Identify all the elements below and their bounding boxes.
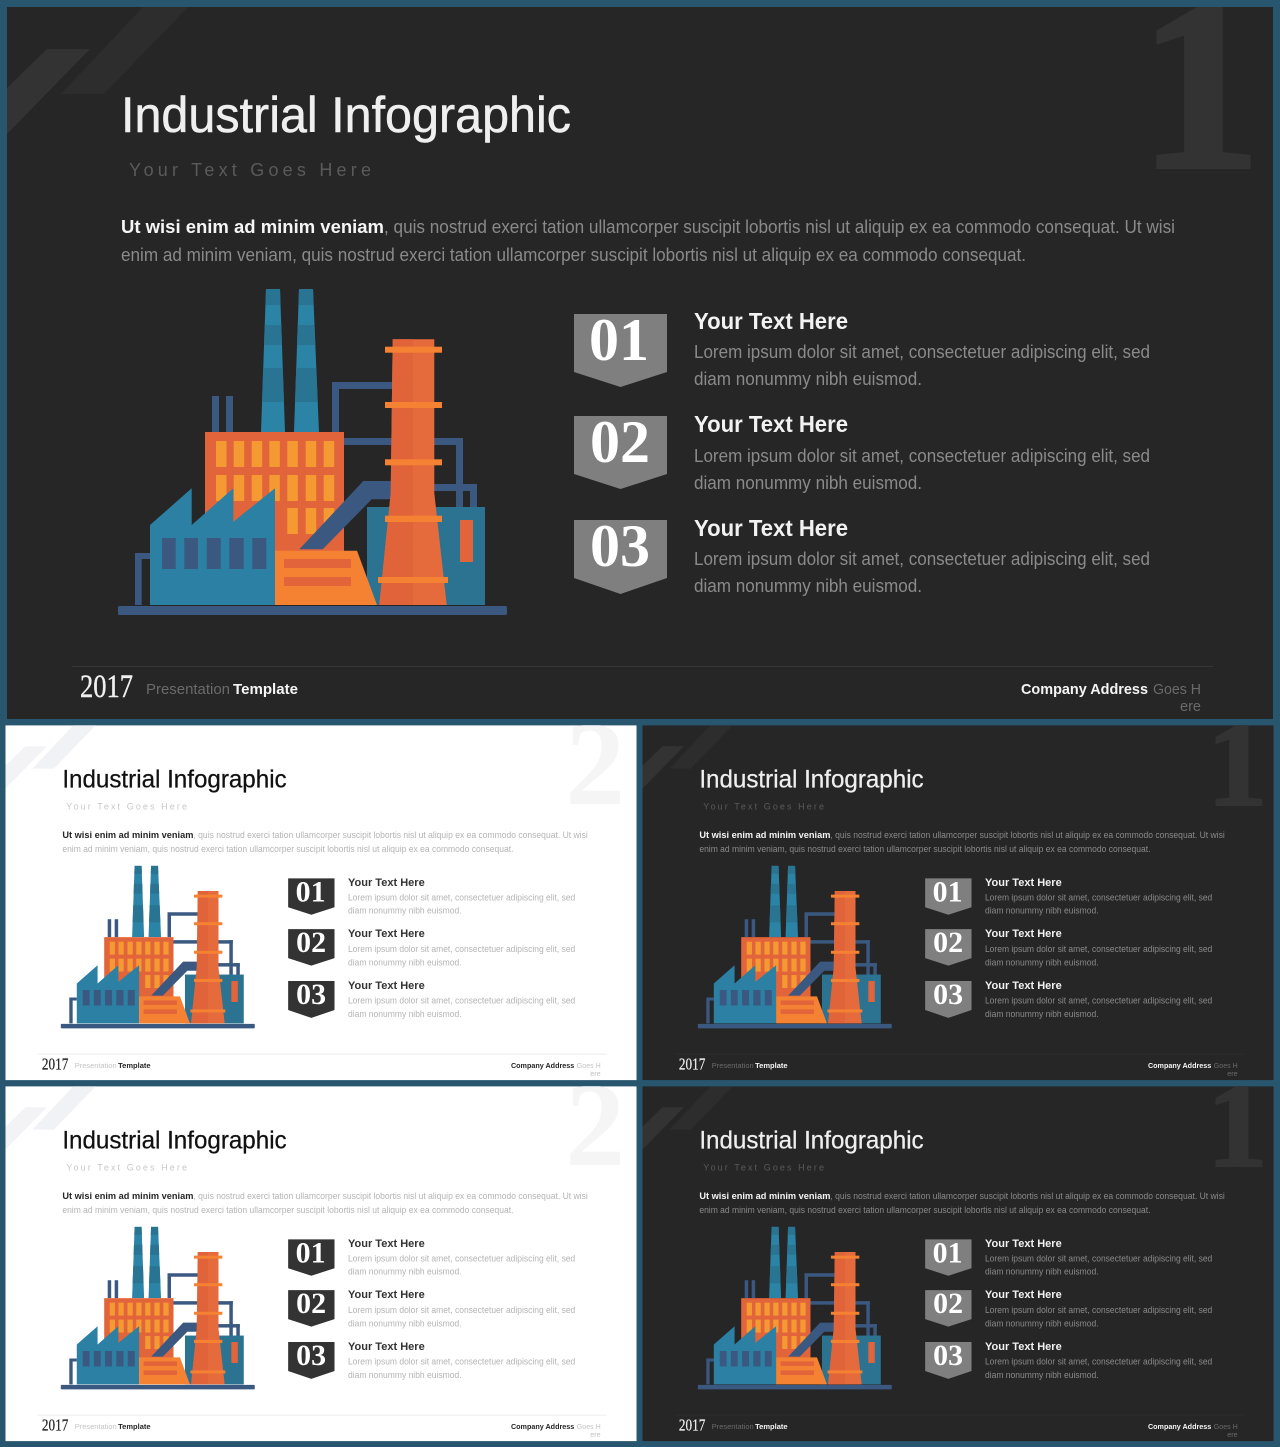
panel: small dark slide bottom right: Your Text Here [985, 1238, 1062, 1250]
panel: small white slide top left: Goes H [577, 1061, 601, 1070]
panel: small white slide bottom left: diam nonummy nibh euismod. [348, 1319, 462, 1329]
panel: small dark slide bottom right: Goes H [1214, 1422, 1238, 1431]
panel: small white slide top left: enim ad minim veniam, quis nostrud exerci tation ullamcorper suscipit lobortis nisl ut aliquip ex ea commodo consequat. [62, 844, 513, 854]
panel: small dark slide bottom right: 02 [933, 1287, 963, 1320]
panel: small white slide bottom left: , quis nostrud exerci tation ullamcorper suscipit lobortis nisl ut aliquip ex ea commodo consequat. Ut wisi [193, 1191, 588, 1201]
panel: small dark slide top right: enim ad minim veniam, quis nostrud exerci tation ullamcorper suscipit lobortis nisl ut aliquip ex ea commodo consequat. [699, 844, 1150, 854]
panel: small white slide top left: Presentation [75, 1061, 117, 1070]
panel: large dark slide: Goes H [1153, 681, 1201, 698]
panel: small white slide top left: , quis nostrud exerci tation ullamcorper suscipit lobortis nisl ut aliquip ex ea commodo consequat. Ut wisi [193, 830, 588, 840]
panel: small white slide top left: Your Text Here [348, 980, 425, 992]
panel: small dark slide bottom right: Presentation [712, 1422, 754, 1431]
panel: large dark slide: diam nonummy nibh euismod. [694, 576, 922, 596]
panel: small white slide top left [6, 697, 637, 1080]
panel: small white slide top left: Lorem ipsum dolor sit amet, consectetuer adipiscing elit, sed [348, 944, 575, 954]
panel: small dark slide bottom right: diam nonummy nibh euismod. [985, 1319, 1099, 1329]
panel: large dark slide: 2017 [80, 669, 133, 705]
panel: small white slide top left: ere [590, 1069, 601, 1078]
panel: large dark slide: Template [233, 681, 298, 698]
panel: small white slide bottom left: Presentation [75, 1422, 117, 1431]
panel: large dark slide: ere [1180, 698, 1201, 715]
panel: small dark slide top right: Your Text Goes Here [703, 802, 824, 812]
panel: small white slide top left: Your Text Here [348, 928, 425, 940]
panel: small dark slide top right: Your Text Here [985, 928, 1062, 940]
panel: small white slide bottom left: 01 [296, 1236, 326, 1269]
panel: small white slide bottom left: 2 [565, 1058, 625, 1191]
panel: small dark slide bottom right: 1 [1207, 1058, 1268, 1193]
panel: small dark slide bottom right: Ut wisi enim ad minim veniam [699, 1191, 830, 1201]
panel: small white slide top left: 01 [296, 875, 326, 908]
panel: small white slide top left: Industrial Infographic [62, 766, 287, 794]
panel: small white slide top left: diam nonummy nibh euismod. [348, 1009, 462, 1019]
panel: small white slide top left: Your Text Goes Here [66, 802, 187, 812]
panel: large dark slide: Your Text Here [694, 411, 848, 437]
panel: small dark slide bottom right: , quis nostrud exerci tation ullamcorper suscipit lobortis nisl ut aliquip ex ea commodo consequat. Ut wisi [830, 1191, 1225, 1201]
panel: small dark slide bottom right: ere [1227, 1430, 1238, 1439]
panel: large dark slide: 03 [590, 513, 650, 579]
panel: small white slide bottom left: Your Text Goes Here [66, 1163, 187, 1173]
panel: small white slide top left: Your Text Here [348, 877, 425, 889]
panel: small dark slide top right: Lorem ipsum dolor sit amet, consectetuer adipiscing elit, sed [985, 892, 1212, 902]
panel: large dark slide: Lorem ipsum dolor sit amet, consectetuer adipiscing elit, sed [694, 342, 1150, 362]
panel: small dark slide top right: 03 [933, 978, 963, 1011]
panel: small dark slide bottom right: Your Text Here [985, 1289, 1062, 1301]
panel: small white slide top left: Lorem ipsum dolor sit amet, consectetuer adipiscing elit, sed [348, 995, 575, 1005]
panel: large dark slide: Lorem ipsum dolor sit amet, consectetuer adipiscing elit, sed [694, 549, 1150, 569]
panel: small white slide top left: Company Address [511, 1061, 574, 1070]
panel: small dark slide bottom right: enim ad minim veniam, quis nostrud exerci tation ullamcorper suscipit lobortis nisl ut aliquip ex ea commodo consequat. [699, 1205, 1150, 1215]
panel: small white slide top left: Template [118, 1061, 151, 1070]
panel: small white slide top left: 2017 [42, 1054, 68, 1073]
panel: small dark slide bottom right: diam nonummy nibh euismod. [985, 1370, 1099, 1380]
panel: small white slide bottom left: Company Address [511, 1422, 574, 1431]
panel: large dark slide: Presentation [146, 681, 230, 698]
panel: small white slide bottom left: Lorem ipsum dolor sit amet, consectetuer adipiscing elit, sed [348, 1356, 575, 1366]
panel: small dark slide top right: 1 [1207, 697, 1268, 832]
panel: small white slide bottom left: 03 [296, 1339, 326, 1372]
panel: small dark slide bottom right [642, 1058, 1274, 1441]
panel: large dark slide: enim ad minim veniam, quis nostrud exerci tation ullamcorper suscipit lobortis nisl ut aliquip ex ea commodo consequat. [121, 244, 1026, 265]
panel: small dark slide bottom right: Company Address [1148, 1422, 1211, 1431]
panel: small dark slide top right: Industrial Infographic [699, 766, 924, 794]
panel: large dark slide: Lorem ipsum dolor sit amet, consectetuer adipiscing elit, sed [694, 446, 1150, 466]
panel: large dark slide: Ut wisi enim ad minim veniam [121, 216, 384, 237]
panel: small dark slide bottom right: Template [755, 1422, 788, 1431]
panel: small white slide top left: 03 [296, 978, 326, 1011]
panel: small white slide bottom left [6, 1058, 637, 1441]
panel: small white slide bottom left: Lorem ipsum dolor sit amet, consectetuer adipiscing elit, sed [348, 1305, 575, 1315]
panel: small dark slide top right: diam nonummy nibh euismod. [985, 1009, 1099, 1019]
panel: small dark slide top right: 2017 [679, 1054, 705, 1073]
panel: small dark slide top right: 02 [933, 926, 963, 959]
panel: small white slide top left: Lorem ipsum dolor sit amet, consectetuer adipiscing elit, sed [348, 892, 575, 902]
panel: large dark slide: diam nonummy nibh euismod. [694, 473, 922, 493]
panel: small dark slide top right: Ut wisi enim ad minim veniam [699, 830, 830, 840]
panel: large dark slide: Your Text Here [694, 515, 848, 541]
panel: large dark slide: diam nonummy nibh euismod. [694, 369, 922, 389]
panel: small dark slide top right: Company Address [1148, 1061, 1211, 1070]
panel: small dark slide bottom right: Your Text Goes Here [703, 1163, 824, 1173]
panel: small dark slide bottom right: diam nonummy nibh euismod. [985, 1267, 1099, 1277]
panel: large dark slide: Industrial Infographic [121, 87, 571, 143]
panel: small dark slide top right: diam nonummy nibh euismod. [985, 958, 1099, 968]
panel: large dark slide: 02 [590, 409, 650, 475]
panel: small white slide bottom left: Lorem ipsum dolor sit amet, consectetuer adipiscing elit, sed [348, 1253, 575, 1263]
panel: small dark slide top right: , quis nostrud exerci tation ullamcorper suscipit lobortis nisl ut aliquip ex ea commodo consequat. Ut wisi [830, 830, 1225, 840]
panel: small dark slide top right: Your Text Here [985, 980, 1062, 992]
panel: small white slide top left: diam nonummy nibh euismod. [348, 906, 462, 916]
panel: small dark slide bottom right: Lorem ipsum dolor sit amet, consectetuer adipiscing elit, sed [985, 1305, 1212, 1315]
panel: small dark slide bottom right: Lorem ipsum dolor sit amet, consectetuer adipiscing elit, sed [985, 1253, 1212, 1263]
panel: small dark slide top right: 01 [933, 875, 963, 908]
panel: small dark slide top right: diam nonummy nibh euismod. [985, 906, 1099, 916]
panel: small white slide top left: 2 [565, 697, 625, 830]
panel: small white slide top left: Ut wisi enim ad minim veniam [62, 830, 193, 840]
panel: small white slide bottom left: Ut wisi enim ad minim veniam [62, 1191, 193, 1201]
panel: small white slide bottom left: Your Text Here [348, 1341, 425, 1353]
panel: small dark slide bottom right: 01 [933, 1236, 963, 1269]
panel: large dark slide: 01 [589, 307, 649, 373]
panel: small dark slide top right [642, 697, 1274, 1080]
panel: small white slide bottom left: Industrial Infographic [62, 1127, 287, 1155]
panel: small white slide top left: diam nonummy nibh euismod. [348, 958, 462, 968]
panel: small white slide bottom left: diam nonummy nibh euismod. [348, 1370, 462, 1380]
panel: small dark slide top right: Presentation [712, 1061, 754, 1070]
panel: small dark slide bottom right: Your Text Here [985, 1341, 1062, 1353]
panel: small white slide bottom left: Your Text Here [348, 1289, 425, 1301]
panel: small white slide bottom left: Template [118, 1422, 151, 1431]
panel: small dark slide top right: ere [1227, 1069, 1238, 1078]
panel: small white slide bottom left: enim ad minim veniam, quis nostrud exerci tation ullamcorper suscipit lobortis nisl ut aliquip ex ea commodo consequat. [62, 1205, 513, 1215]
panel: small white slide bottom left: Goes H [577, 1422, 601, 1431]
panel: large dark slide: Your Text Goes Here [129, 160, 371, 180]
panel: small white slide bottom left: 2017 [42, 1415, 68, 1434]
panel: small white slide top left: 02 [296, 926, 326, 959]
panel: large dark slide [7, 0, 1273, 719]
panel: small dark slide top right: Template [755, 1061, 788, 1070]
panel: small dark slide bottom right: Industrial Infographic [699, 1127, 924, 1155]
panel: small white slide bottom left: 02 [296, 1287, 326, 1320]
panel: small white slide bottom left: Your Text Here [348, 1238, 425, 1250]
panel: small dark slide top right: Lorem ipsum dolor sit amet, consectetuer adipiscing elit, sed [985, 995, 1212, 1005]
panel: large dark slide: Company Address [1021, 681, 1148, 698]
panel: small dark slide bottom right: 2017 [679, 1415, 705, 1434]
panel: small white slide bottom left: ere [590, 1430, 601, 1439]
panel: large dark slide: Your Text Here [694, 308, 848, 334]
panel: small dark slide bottom right: 03 [933, 1339, 963, 1372]
panel: small dark slide top right: Lorem ipsum dolor sit amet, consectetuer adipiscing elit, sed [985, 944, 1212, 954]
panel: small dark slide top right: Goes H [1214, 1061, 1238, 1070]
panel: small dark slide top right: Your Text Here [985, 877, 1062, 889]
panel: small dark slide bottom right: Lorem ipsum dolor sit amet, consectetuer adipiscing elit, sed [985, 1356, 1212, 1366]
panel: large dark slide: , quis nostrud exerci tation ullamcorper suscipit lobortis nisl ut aliquip ex ea commodo consequat. Ut wisi [384, 216, 1175, 237]
panel: small white slide bottom left: diam nonummy nibh euismod. [348, 1267, 462, 1277]
